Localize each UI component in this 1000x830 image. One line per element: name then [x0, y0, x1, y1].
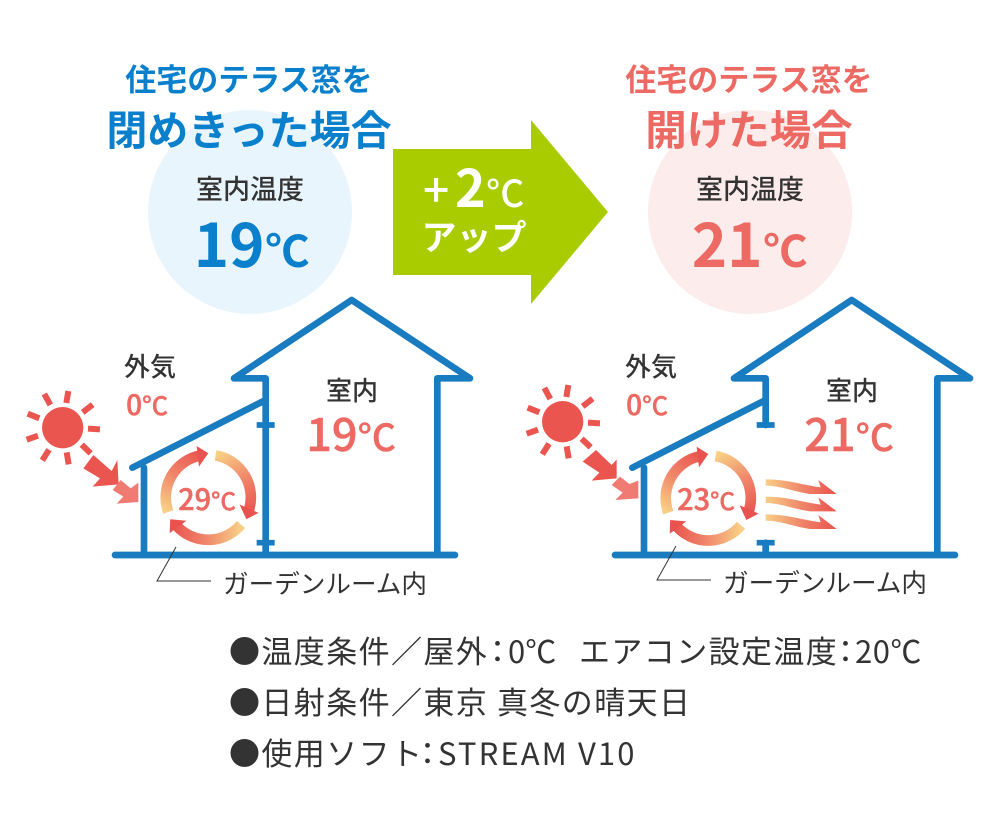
value: outside 0 degrees: 0°C	[126, 384, 168, 424]
arrow: plus 2 degrees up: 2	[455, 147, 486, 222]
label: indoor temperature open: 室内温度	[696, 168, 804, 207]
circulation arrows: open	[664, 447, 774, 561]
icon: sun	[27, 391, 100, 464]
text block: conditions: STREAM V10	[438, 729, 637, 774]
heading: open	[625, 55, 873, 157]
value: outside 0 degrees: 0°C	[626, 384, 668, 424]
heading: open: 開けた場合	[645, 97, 853, 157]
house outline: closed	[115, 300, 470, 555]
leader line: garden room	[157, 547, 211, 581]
heading: open: 住宅のテラス窓を	[625, 55, 873, 100]
arrow: plus 2 degrees up: アップ	[421, 210, 527, 261]
circle background: open	[648, 110, 852, 314]
text block: conditions: 20℃	[855, 627, 922, 672]
text block: conditions: エアコン設定温度	[579, 627, 838, 672]
label: outside air: 外気	[625, 347, 677, 384]
arrow: plus 2 degrees up: +	[423, 155, 449, 221]
value: indoors 21 degrees: 21°C	[804, 399, 894, 464]
value: 21 degrees: 21°C	[692, 198, 807, 285]
arrows: solar radiation	[583, 450, 638, 500]
label: garden room: ガーデンルーム内	[223, 564, 427, 601]
label: indoors: 室内	[326, 371, 378, 408]
text block: conditions	[229, 627, 922, 774]
value: 19 degrees: 19°C	[194, 198, 309, 285]
wind arrows: heat flow into room	[766, 479, 837, 529]
circulation arrows: closed	[164, 446, 274, 560]
arrows: solar radiation	[83, 455, 138, 504]
label: outside air: 外気	[124, 347, 176, 384]
text block: conditions: ●使用ソフト	[229, 729, 423, 774]
heading: closed: 閉めきった場合	[106, 97, 392, 157]
text block: conditions: 0℃	[508, 627, 556, 672]
house diagram: closed	[27, 300, 470, 601]
heading: closed	[106, 55, 392, 157]
circle background: closed	[148, 110, 352, 314]
text block: conditions: ●温度条件／屋外	[229, 627, 488, 672]
text block: conditions: ：	[830, 627, 862, 672]
label: garden room: ガーデンルーム内	[723, 563, 927, 600]
label: indoor temperature closed: 室内温度	[196, 168, 304, 207]
text block: conditions: ：	[412, 729, 444, 774]
icon: sun	[527, 385, 600, 458]
heading: closed: 住宅のテラス窓を	[125, 55, 373, 100]
arrow: plus 2 degrees up	[393, 120, 608, 304]
panel: open window case	[527, 55, 970, 600]
value: garden room 23 degrees: 23°C	[677, 477, 735, 519]
house diagram: open	[527, 300, 970, 600]
value: indoors 19 degrees: 19°C	[306, 399, 396, 464]
text block: conditions: ：	[482, 627, 514, 672]
leader line: garden room	[657, 546, 711, 580]
house outline: open	[615, 300, 970, 555]
panel: closed window case	[27, 55, 470, 601]
value: garden room 29 degrees: 29°C	[178, 477, 236, 519]
label: indoors: 室内	[826, 371, 878, 408]
arrow: plus 2 degrees up: °C	[486, 164, 524, 218]
text block: conditions: ●日射条件／東京	[229, 678, 488, 723]
text block: conditions: 真冬の晴天日	[497, 678, 691, 723]
